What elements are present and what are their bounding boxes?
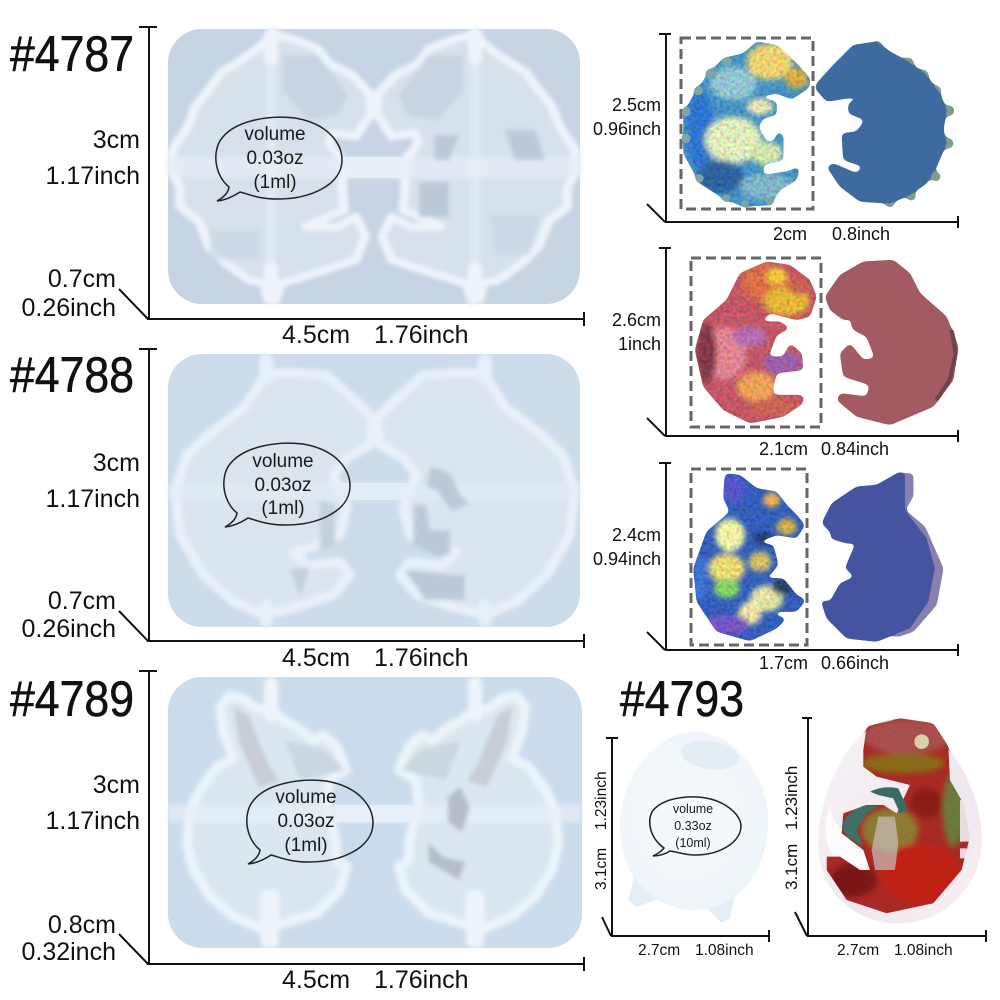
- silicone mold 4788: [168, 354, 580, 627]
- speech bubble: volume 4793: [650, 797, 741, 856]
- blue dinosaur front: [677, 37, 810, 210]
- width label 4787: 4.5cm: [282, 321, 350, 349]
- width label 4788: 4.5cm: [282, 644, 350, 672]
- height label resin egg: 1.23inch: [782, 766, 801, 830]
- speech bubble: volume 4793: volume: [673, 802, 713, 816]
- speech bubble: volume 4789: [247, 780, 373, 864]
- dimension axes 4787: [119, 27, 584, 326]
- speech bubble: volume 4789: volume: [275, 787, 337, 808]
- height label 4789: 3cm: [93, 771, 140, 799]
- speech bubble: volume 4789: (1ml): [284, 835, 328, 856]
- height label blue dinosaur: 2.5cm: [612, 95, 661, 115]
- width label blue dinosaur: 2cm: [773, 224, 807, 244]
- width label egg mold: 2.7cm: [638, 942, 680, 959]
- width label 4789: 1.76inch: [374, 966, 469, 994]
- dashed selection box indigo: [691, 469, 807, 645]
- silicone mold 4787: [168, 29, 580, 304]
- panel: blue dinosaur casting: [593, 34, 958, 244]
- dimension axes egg mold: [602, 738, 769, 942]
- panel: egg mold 4793: [593, 671, 769, 959]
- width label resin egg: 2.7cm: [837, 942, 879, 959]
- dashed selection box red: [691, 258, 821, 427]
- dimension axes indigo dinosaur: [647, 463, 958, 656]
- depth label 4789: 0.8cm: [48, 911, 116, 939]
- depth label 4787: 0.7cm: [48, 265, 116, 293]
- speech bubble: volume 4788: volume: [252, 451, 314, 472]
- title: #4789: #4789: [10, 671, 134, 727]
- speech bubble: volume 4788: [224, 443, 350, 527]
- height label 4787: 3cm: [93, 126, 140, 154]
- blue dinosaur back silhouette: [815, 41, 955, 208]
- width label indigo dinosaur: 1.7cm: [759, 653, 808, 673]
- depth label 4788: 0.7cm: [48, 587, 116, 615]
- height label 4788: 3cm: [93, 449, 140, 477]
- depth label 4789: 0.32inch: [21, 938, 116, 966]
- width label red dinosaur: 2.1cm: [759, 439, 808, 459]
- speech bubble: volume 4793: 0.33oz: [674, 819, 712, 833]
- speech bubble: volume 4787: 0.03oz: [246, 148, 304, 169]
- speech bubble: volume 4793: (10ml): [675, 836, 711, 850]
- red dinosaur back silhouette: [825, 260, 958, 425]
- speech bubble: volume 4788: (1ml): [261, 498, 305, 519]
- dashed selection box blue: [681, 38, 813, 209]
- width label blue dinosaur: 0.8inch: [832, 224, 890, 244]
- dimension axes 4788: [119, 349, 584, 648]
- dimension axes resin egg: [795, 718, 986, 942]
- speech bubble: volume 4787: [216, 117, 342, 201]
- title: #4793: #4793: [620, 671, 744, 727]
- height label resin egg: 3.1cm: [782, 844, 801, 890]
- red dinosaur front: [695, 262, 816, 423]
- width label 4788: 1.76inch: [374, 644, 469, 672]
- width label indigo dinosaur: 0.66inch: [821, 653, 889, 673]
- silicone egg mold: [620, 732, 768, 923]
- width label 4789: 4.5cm: [282, 966, 350, 994]
- dimension axes 4789: [119, 671, 584, 971]
- dimension axes red dinosaur: [647, 248, 958, 442]
- height label red dinosaur: 1inch: [618, 334, 661, 354]
- indigo dinosaur front: [694, 474, 804, 640]
- height label blue dinosaur: 0.96inch: [593, 119, 661, 139]
- height label 4789: 1.17inch: [45, 807, 140, 835]
- depth label 4788: 0.26inch: [21, 615, 116, 643]
- height label indigo dinosaur: 0.94inch: [593, 549, 661, 569]
- speech bubble: volume 4787: volume: [244, 124, 306, 145]
- panel: red dinosaur casting: [612, 248, 958, 459]
- panel: indigo dinosaur casting: [593, 463, 958, 673]
- width label resin egg: 1.08inch: [894, 942, 953, 959]
- height label egg mold: 1.23inch: [593, 771, 610, 830]
- width label 4787: 1.76inch: [374, 321, 469, 349]
- width label egg mold: 1.08inch: [695, 942, 754, 959]
- height label egg mold: 3.1cm: [593, 848, 610, 890]
- height label 4787: 1.17inch: [45, 162, 140, 190]
- panel: mold 4789: [10, 671, 584, 994]
- height label 4788: 1.17inch: [45, 485, 140, 513]
- depth label 4787: 0.26inch: [21, 294, 116, 322]
- height label red dinosaur: 2.6cm: [612, 310, 661, 330]
- title: #4788: #4788: [10, 347, 134, 403]
- panel: mold 4787: [10, 26, 584, 349]
- speech bubble: volume 4788: 0.03oz: [254, 475, 312, 496]
- resin egg with embedded dinosaur: [818, 717, 982, 923]
- width label red dinosaur: 0.84inch: [821, 439, 889, 459]
- indigo dinosaur back silhouette: [821, 472, 943, 642]
- title: #4787: #4787: [10, 26, 134, 82]
- dimension axes blue dinosaur: [647, 34, 958, 228]
- height label indigo dinosaur: 2.4cm: [612, 525, 661, 545]
- silicone mold 4789: [168, 677, 582, 948]
- panel: resin egg with dinosaur: [782, 717, 986, 959]
- panel: mold 4788: [10, 347, 584, 672]
- speech bubble: volume 4787: (1ml): [253, 172, 297, 193]
- speech bubble: volume 4789: 0.03oz: [277, 811, 335, 832]
